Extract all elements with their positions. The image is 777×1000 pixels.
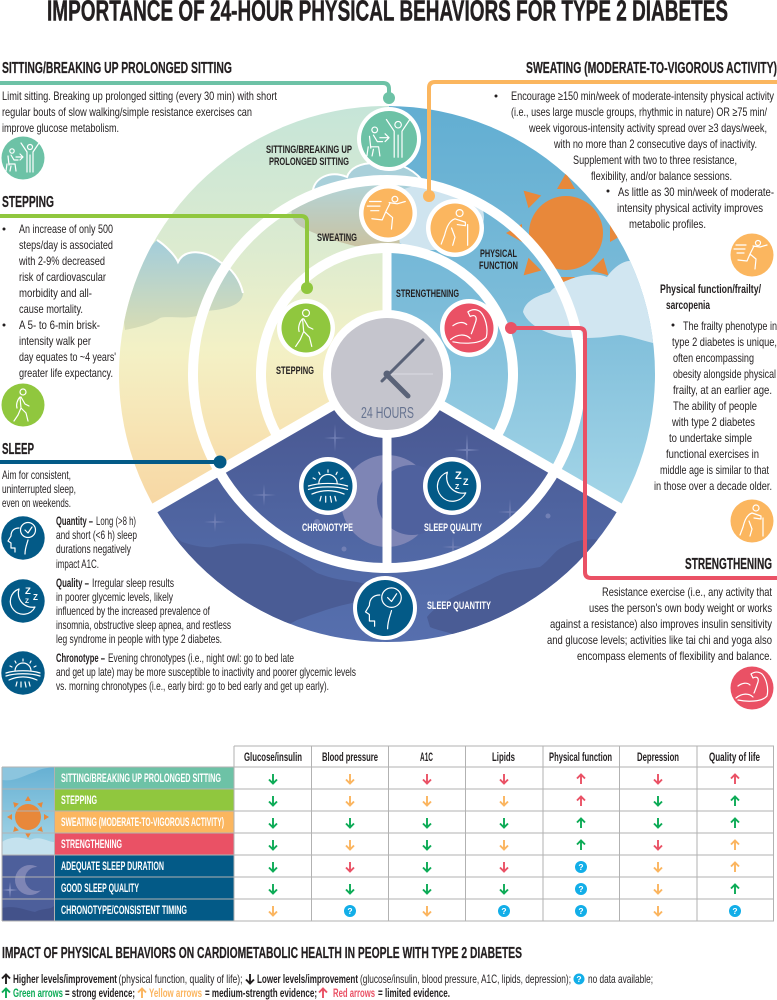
arrows row: chronotype: ? xyxy=(501,906,507,916)
leader line: strengthening xyxy=(505,322,777,578)
moon xyxy=(342,455,418,547)
night sector xyxy=(158,410,616,642)
text: stepping: with 2-9% decreased xyxy=(18,254,105,268)
text: stepping: An increase of only 500 xyxy=(19,222,113,236)
table column headers: Blood pressure xyxy=(322,752,378,764)
text: quantity: Quantity – xyxy=(56,514,93,528)
table thumbnail: day xyxy=(2,767,54,855)
text: sleep intro: Aim for consistent, xyxy=(2,468,71,482)
arrows row: stepping xyxy=(269,796,739,806)
icon: stepping xyxy=(2,384,44,426)
arrows row: sleep quality xyxy=(269,883,739,895)
arrows row: chronotype: ? xyxy=(578,906,584,916)
legend line 1: ? xyxy=(576,974,582,984)
text: physical function: to undertake simple xyxy=(669,431,752,445)
legend line 1: (physical function, quality of life); xyxy=(118,972,242,986)
wheel icon: sleep quality: Z xyxy=(455,470,462,482)
panel: sleep xyxy=(1,441,356,695)
legend line 2: = strong evidence; xyxy=(65,986,135,1000)
text: chronotype: and get up late) may be more susceptible to inactivity and poorer glycemic levels xyxy=(56,665,356,679)
heading: stepping: STEPPING xyxy=(2,194,54,211)
text: sleep intro: even on weekends. xyxy=(2,496,71,510)
legend line 1 xyxy=(2,972,653,986)
wheel icon: sleep quality xyxy=(423,457,481,515)
text: quality xyxy=(56,576,231,646)
legend line 1: Higher levels/improvement xyxy=(13,972,117,986)
text: stepping: intensity walk per xyxy=(19,334,91,348)
text: strengthening xyxy=(547,585,773,663)
wheel icon: sitting xyxy=(357,107,421,171)
wheel icon: strengthening xyxy=(440,299,498,357)
table row labels: GOOD SLEEP QUALITY xyxy=(61,883,139,895)
text: sleep intro xyxy=(2,468,76,510)
panel: sweating xyxy=(494,60,777,276)
leader line: sleep xyxy=(0,456,226,468)
table row labels: STEPPING xyxy=(61,795,97,807)
arrows row: chronotype: ? xyxy=(732,906,738,916)
wheel labels: FUNCTION xyxy=(479,260,518,272)
wheel labels: STEPPING xyxy=(276,365,314,377)
wheel labels: SLEEP QUANTITY xyxy=(427,600,491,612)
table row labels: CHRONOTYPE/CONSISTENT TIMING xyxy=(61,905,187,917)
icon: sweating xyxy=(730,234,774,276)
wheel labels: PHYSICAL xyxy=(480,248,517,260)
text: sleep intro: uninterrupted sleep, xyxy=(2,482,76,496)
text: quality: insomnia, obstructive sleep apnea, and restless xyxy=(56,618,231,632)
table row labels: SITTING/BREAKING UP PROLONGED SITTING xyxy=(61,773,221,785)
wheel icon: stepping xyxy=(277,299,335,357)
arrows row: sleep duration xyxy=(269,861,739,873)
icon: physical function xyxy=(730,500,774,542)
text: quality: influenced by the increased prevalence of xyxy=(56,604,210,618)
arrows row: sweating xyxy=(269,818,739,828)
cloud under sweating icon xyxy=(399,186,484,250)
legend line 1: no data available; xyxy=(588,972,653,986)
text: chronotype xyxy=(56,651,356,693)
wheel icon: sweating xyxy=(359,184,417,242)
clock xyxy=(323,310,451,438)
table row labels: ADEQUATE SLEEP DURATION xyxy=(61,861,164,873)
arrows row: sleep duration: ? xyxy=(578,862,584,872)
wheel labels xyxy=(266,144,518,612)
text: stepping: A 5- to 6-min brisk- xyxy=(19,318,100,332)
legend line 1: Lower levels/improvement xyxy=(257,972,358,986)
icon: sleep quality: Z xyxy=(33,593,38,602)
table caption: IMPACT OF PHYSICAL BEHAVIORS ON CARDIOMETABOLIC HEALTH IN PEOPLE WITH TYPE 2 DIABETES xyxy=(2,945,522,962)
text: chronotype: Chronotype – xyxy=(56,651,105,665)
text: quality: Irregular sleep results xyxy=(92,576,174,590)
icon: sleep quality: Z xyxy=(25,586,31,597)
text: quantity xyxy=(56,514,137,571)
icon: chronotype xyxy=(1,651,45,695)
arrows row: sitting xyxy=(269,774,739,784)
table column headers xyxy=(244,752,760,764)
sun xyxy=(506,174,618,282)
wheel labels: SWEATING xyxy=(317,232,357,244)
wheel labels: SITTING/BREAKING UP xyxy=(266,144,352,156)
white rings and spokes xyxy=(146,180,628,570)
icon: sleep quality: Z xyxy=(25,598,29,605)
text: sweating: metabolic profiles. xyxy=(629,217,706,231)
text: sweating xyxy=(494,89,774,231)
panel: physical function xyxy=(654,282,777,542)
table column headers: Lipids xyxy=(492,752,515,764)
text: sitting xyxy=(2,89,278,135)
dark clouds xyxy=(172,535,364,624)
leader line: sitting xyxy=(0,83,395,104)
text: stepping: steps/day is associated xyxy=(19,238,113,252)
heading: sitting: SITTING/BREAKING UP PROLONGED SITTING xyxy=(2,60,232,77)
table row labels: SWEATING (MODERATE-TO-VIGOROUS ACTIVITY) xyxy=(61,817,224,829)
stars xyxy=(204,424,550,558)
table column headers: Depression xyxy=(637,752,679,764)
text: chronotype: vs. morning chronotypes (i.e., early bird: go to bed early and get up early). xyxy=(56,679,329,693)
heading: physical function: sarcopenia xyxy=(666,298,710,312)
legend line 1: (glucose/insulin, blood pressure, A1C, lipids, depression); xyxy=(360,972,571,986)
leader line: sweating xyxy=(423,82,777,202)
text: stepping: greater life expectancy. xyxy=(19,366,113,380)
wheel icon: physical function xyxy=(426,199,484,257)
cloud left xyxy=(124,240,243,330)
text: sitting: improve glucose metabolism. xyxy=(2,121,119,135)
text: physical function xyxy=(654,319,777,493)
text: quantity: durations negatively xyxy=(56,542,131,556)
text: stepping: cause mortality. xyxy=(19,302,83,316)
wheel icon: sleep quality: Z xyxy=(455,484,460,491)
wheel icon: sleep quality: Z xyxy=(463,477,469,487)
arrows row: sleep quality: ? xyxy=(578,884,584,894)
icon: sleep quality xyxy=(1,579,45,623)
legend line 2: Yellow arrows xyxy=(149,986,202,1000)
legend xyxy=(2,972,653,1000)
table row labels: STRENGTHENING xyxy=(61,839,122,851)
table column headers: A1C xyxy=(420,752,433,764)
wheel icon: sleep quantity xyxy=(353,576,417,640)
text: stepping: day equates to ~4 years' xyxy=(19,350,116,364)
wheel icon: chronotype xyxy=(299,457,357,515)
day half of wheel xyxy=(115,100,670,650)
wheel labels: PROLONGED SITTING xyxy=(269,156,349,168)
wheel diagram xyxy=(115,100,670,650)
text: stepping: risk of cardiovascular xyxy=(19,270,106,284)
text: chronotype: Evening chronotypes (i.e., night owl: go to bed late xyxy=(108,651,294,665)
text: physical function: with type 2 diabetes xyxy=(671,415,755,429)
wheel labels: STRENGTHENING xyxy=(396,288,459,300)
icon: sitting xyxy=(2,136,44,180)
text: stepping xyxy=(2,222,116,380)
text: quantity: Long (>8 h) xyxy=(96,514,136,528)
table row labels xyxy=(55,767,234,921)
wheel labels: SLEEP QUALITY xyxy=(424,522,482,534)
icon: strengthening xyxy=(730,666,774,710)
cloud top xyxy=(312,162,422,190)
text: quality: Quality – xyxy=(56,576,89,590)
text: stepping: morbidity and all- xyxy=(19,286,92,300)
text: quality: leg syndrome in people with type 2 diabetes. xyxy=(56,632,222,646)
leader line: stepping xyxy=(0,216,313,294)
text: sweating: flexibility, and/or balance sessions. xyxy=(591,169,732,183)
heading: sleep: SLEEP xyxy=(2,441,34,458)
legend line 2 xyxy=(2,986,450,1000)
table thumbnail: night xyxy=(2,855,54,921)
icon: sleep quantity xyxy=(1,516,45,560)
text: sitting: Limit sitting. Breaking up prolonged sitting (every 30 min) with short xyxy=(2,89,278,103)
arrows row: chronotype xyxy=(269,905,741,917)
table xyxy=(2,746,774,921)
arrows row: chronotype: ? xyxy=(347,906,353,916)
text: sitting: regular bouts of slow walking/simple resistance exercises can xyxy=(2,105,252,119)
clock: 24 HOURS xyxy=(361,405,414,422)
panel: strengthening xyxy=(547,556,774,710)
text: quantity: and short (<6 h) sleep xyxy=(56,528,137,542)
legend line 2: Red arrows xyxy=(333,986,375,1000)
legend line 2: = medium-strength evidence; xyxy=(205,986,317,1000)
wheel labels: CHRONOTYPE xyxy=(302,522,353,534)
legend line 2: Green arrows xyxy=(13,986,63,1000)
legend line 2: = limited evidence. xyxy=(378,986,450,1000)
panel: sitting xyxy=(2,60,278,180)
table column headers: Glucose/insulin xyxy=(244,752,302,764)
table column headers: Physical function xyxy=(549,752,612,764)
text: quality: in poorer glycemic levels, likely xyxy=(56,590,173,604)
panel: stepping xyxy=(2,194,116,426)
arrows row: strengthening xyxy=(269,840,739,850)
text: quantity: impact A1C. xyxy=(56,557,99,571)
cloud right xyxy=(523,261,653,343)
heading: physical function xyxy=(660,282,761,312)
